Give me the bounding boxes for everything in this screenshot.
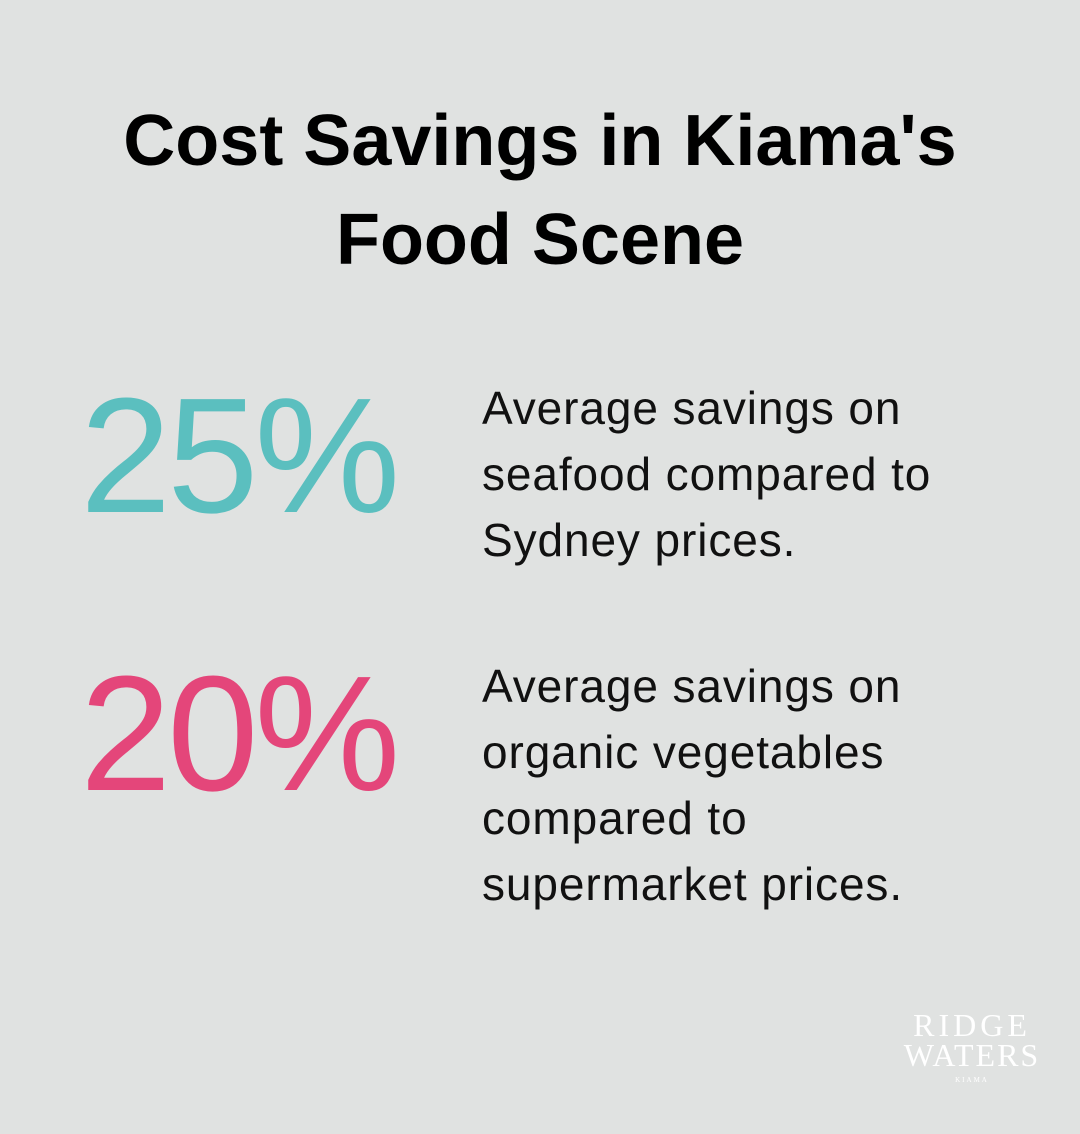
title: Cost Savings in Kiama's xyxy=(123,101,957,181)
logo: Ridge Waters Kiama: KIAMA xyxy=(955,1076,989,1084)
text: seafood savings: Average savings on xyxy=(482,382,901,434)
text: vegetable savings: compared to xyxy=(482,792,748,844)
text: seafood savings xyxy=(482,382,931,566)
logo: Ridge Waters Kiama xyxy=(904,1007,1040,1084)
title: Food Scene xyxy=(336,200,744,280)
text: seafood savings: seafood compared to xyxy=(482,448,931,500)
title xyxy=(123,101,957,280)
text: vegetable savings: supermarket prices. xyxy=(482,858,903,910)
text: seafood savings: Sydney prices. xyxy=(482,514,796,566)
text: vegetable savings: organic vegetables xyxy=(482,726,884,778)
stat: 25%: 25% xyxy=(80,364,396,547)
logo: Ridge Waters Kiama: RIDGE xyxy=(913,1007,1031,1043)
text: vegetable savings xyxy=(482,660,903,910)
text: vegetable savings: Average savings on xyxy=(482,660,901,712)
stat: 20%: 20% xyxy=(80,642,396,825)
logo: Ridge Waters Kiama: WATERS xyxy=(904,1037,1040,1073)
